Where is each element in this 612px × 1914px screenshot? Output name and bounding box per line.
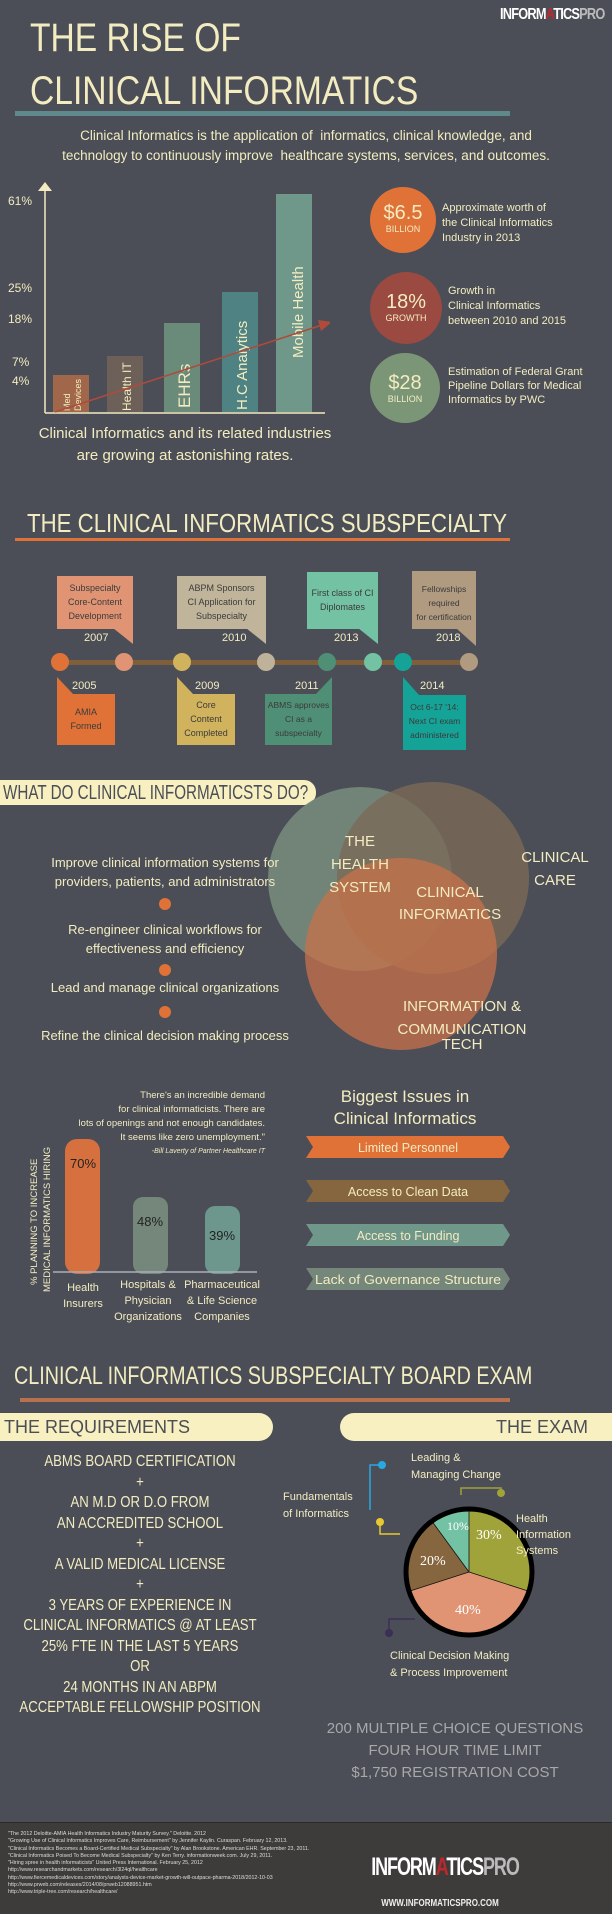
timeline: Completed [184,728,228,738]
venn diagram: CARE [534,872,576,889]
quote: lots of openings and not enough candidates. [79,1118,265,1129]
event 2007: Core-Content [68,597,122,607]
pill: the exam: THE EXAM [496,1417,588,1437]
event 2018: required [428,598,460,608]
exam pie chart: Managing Change [411,1469,501,1481]
stat: 18% growth: 18% [386,291,426,313]
bar chart: 7% [12,355,30,369]
requirements list: 3 YEARS OF EXPERIENCE IN [49,1596,231,1614]
list: what they do: Re-engineer clinical workflows for [68,922,262,937]
stat: 18% growth: Clinical Informatics [448,300,540,312]
pill: requirements [0,1413,273,1441]
issues ribbons [306,1136,510,1290]
timeline: administered [410,730,459,740]
bar chart: Devices [73,378,83,411]
exam pie chart: 20% [420,1554,446,1569]
timeline: subspecialty [275,728,322,738]
venn diagram: CLINICAL [416,884,484,901]
venn diagram: COMMUNICATION [398,1021,526,1038]
footer [0,1822,612,1914]
event 2010: Subspecialty [196,611,247,621]
stat: 28 billion: $28 [388,372,422,394]
event 2013 [307,572,378,629]
requirements list: AN ACCREDITED SCHOOL [57,1514,223,1532]
timeline: Oct 6-17 '14: [410,702,459,712]
hiring bar chart: Companies [194,1311,250,1323]
venn diagram [268,782,589,1050]
hiring bar chart: 70% [70,1156,96,1171]
bar chart [8,182,330,414]
references: http://www.prweb.com/releases/2014/08/prweb12088951.htm [8,1882,152,1888]
chart caption: are growing at astonishing rates. [77,447,293,464]
requirements list: + [136,1474,144,1490]
event 2014: 2014 [420,680,444,692]
exam pie chart: Health [516,1513,548,1525]
intro text: technology to continuously improve healthcare systems, services, and outcomes. [62,148,550,163]
exam pie chart: 30% [476,1528,502,1543]
references [8,1831,309,1895]
title: CLINICAL INFORMATICS [30,69,418,113]
bar chart: 18% [8,312,32,326]
list: what they do: effectiveness and efficiency [86,941,244,956]
timeline: 2007 [84,632,108,644]
requirements list: + [136,1576,144,1593]
stat: 28 billion [370,353,583,423]
hiring bar chart: Physician [124,1295,172,1307]
exam facts: $1,750 REGISTRATION COST [351,1764,559,1781]
footer url: WWW.INFORMATICSPRO.COM [381,1898,499,1909]
references: "Clinical Informatics Poised To Become Medical Subspecialty" by Ken Terry. informationweek.com. July 29, 2011. [8,1853,272,1859]
issues ribbons: Limited Personnel [358,1141,458,1155]
references: http://www.fiercemedicaldevices.com/story/analysts-device-market-growth-will-outpace-pharma-2018/2012-10-03 [8,1875,273,1881]
exam pie chart: & Process Improvement [390,1667,507,1679]
section title: board exam: CLINICAL INFORMATICS SUBSPECIALTY BOARD EXAM [14,1362,532,1390]
exam facts: 200 MULTIPLE CHOICE QUESTIONS [327,1720,583,1737]
hiring bar chart: Pharmaceutical [184,1279,260,1291]
stat: 28 billion: Estimation of Federal Grant [448,366,583,378]
requirements list: 24 MONTHS IN AN ABPM [63,1678,217,1696]
stat: 18% growth: GROWTH [386,313,426,323]
list: what they do: providers, patients, and administrators [55,874,275,889]
bar chart: 4% [12,374,30,388]
stat: 6.5 billion: Industry in 2013 [442,232,520,244]
biggest issues title: Clinical Informatics [334,1109,476,1128]
biggest issues title [334,1087,476,1128]
references: http://www.researchandmarkets.com/research/3l24ql/healthcare [8,1867,158,1873]
event 2007 [57,576,133,629]
exam facts [327,1720,583,1781]
exam pie chart: Information [516,1529,571,1541]
issues ribbons: Access to Funding [357,1229,459,1243]
hiring bar chart [29,1139,260,1323]
event 2007: Subspecialty [69,583,121,593]
venn diagram: INFORMATICS [399,906,501,923]
references: http://www.triple-tree.com/research/healthcare/ [8,1889,118,1895]
bar chart: Med [62,393,72,411]
hiring bar chart: MEDICAL INFORMATICS HIRING [42,1147,53,1292]
timeline [51,571,478,750]
stat: 18% growth: between 2010 and 2015 [448,315,566,327]
exam pie chart: Systems [516,1545,559,1557]
stat: 6.5 billion [370,187,553,253]
exam facts: FOUR HOUR TIME LIMIT [368,1742,542,1759]
hiring bar chart: % PLANNING TO INCREASE [29,1159,40,1285]
intro text [62,128,550,163]
stat: 18% growth [370,272,566,344]
biggest issues title: Biggest Issues in [341,1087,469,1106]
venn diagram: THE [345,833,375,850]
list: what they do: Improve clinical information systems for [51,855,279,870]
venn diagram: CLINICAL [521,849,589,866]
timeline: CI as a [285,714,312,724]
timeline: 2013 [334,632,358,644]
event 2018: Fellowships [422,584,466,594]
event 2009: 2009 [195,680,219,692]
bar chart: Health IT [120,362,134,411]
hiring bar chart: 39% [209,1228,235,1243]
list: what they do: Refine the clinical decision making process [41,1028,289,1043]
quote: There's an incredible demand [140,1090,265,1101]
stat: 6.5 billion: Approximate worth of [442,202,546,214]
issues ribbons: Access to Clean Data [348,1185,468,1199]
hiring bar chart: Insurers [63,1298,103,1310]
stat: 18% growth: Growth in [448,285,495,297]
quote: It seems like zero unemployment." [120,1132,265,1143]
references: "The 2012 Deloitte-AMIA Health Informatics Industry Maturity Survey." Deloitte. 2012 [8,1831,206,1837]
stat: 28 billion: Pipeline Dollars for Medical [448,380,581,392]
exam pie chart [283,1452,571,1679]
exam pie chart: of Informatics [283,1508,350,1520]
bar chart: EHRs [175,364,194,408]
stat: 28 billion: BILLION [388,394,422,404]
requirements list: ACCEPTABLE FELLOWSHIP POSITION [19,1699,261,1716]
hiring bar chart: & Life Science [187,1295,257,1307]
section title: subspecialty: THE CLINICAL INFORMATICS SUBSPECIALTY [27,508,507,538]
stat: 28 billion: Informatics by PWC [448,394,545,406]
timeline: Formed [70,721,102,731]
title [30,16,418,113]
pill: the exam [340,1413,612,1441]
pill: requirements: THE REQUIREMENTS [4,1417,190,1437]
event 2007: Development [68,611,122,621]
requirements list: + [136,1535,144,1552]
timeline: AMIA [75,707,97,717]
quote [79,1090,266,1155]
venn diagram: INFORMATION & [403,998,521,1015]
exam pie chart: 40% [455,1603,481,1618]
hiring bar chart: Organizations [114,1311,182,1323]
timeline: ABMS approves [268,700,329,710]
stat: 6.5 billion: the Clinical Informatics [442,217,553,229]
hiring bar chart: Health [67,1282,99,1294]
requirements list [19,1453,261,1716]
hiring bar chart: 48% [137,1214,163,1229]
intro text: Clinical Informatics is the application of informatics, clinical knowledge, and [80,128,532,143]
quote: for clinical informaticists. There are [118,1104,265,1115]
list: what they do: Lead and manage clinical organizations [51,980,279,995]
bar chart: H.C Analytics [234,321,251,410]
requirements list: AN M.D OR D.O FROM [70,1494,210,1511]
exam pie chart: Fundamentals [283,1491,353,1503]
logo top: INFORMATICSPRO [500,6,604,23]
title: THE RISE OF [30,16,241,60]
requirements list: CLINICAL INFORMATICS @ AT LEAST [23,1617,257,1634]
quote: -Bill Laverty of Partner Healthcare IT [152,1148,265,1155]
chart caption: Clinical Informatics and its related industries [39,425,331,442]
references: "Clinical Informatics Becomes a Board-Certified Medical Subspecialty" by Alan Brookstone. American EHR. September 23, 2011. [8,1846,309,1852]
event 2018: for certification [416,612,472,622]
event 2013: Diplomates [320,602,365,612]
footer logo: INFORMATICSPRO [371,1853,519,1881]
references: "Growing Use of Clinical Informatics Improves Care, Reimbursement" by Jennifer Kaylin. Curaspan. February 12, 2013. [8,1838,288,1844]
stat: 6.5 billion: BILLION [386,224,420,234]
stat: 6.5 billion: $6.5 [384,202,422,224]
timeline: Next CI exam [409,716,460,726]
event 2010 [177,576,266,629]
bar chart: 25% [8,281,32,295]
hiring bar chart: Hospitals & [120,1279,176,1291]
event 2011: 2011 [295,680,319,692]
venn diagram: HEALTH [331,856,389,873]
timeline: Content [190,714,222,724]
event 2010: ABPM Sponsors [188,583,255,593]
requirements list: OR [130,1658,150,1675]
exam pie chart: 10% [447,1519,469,1533]
timeline: 2010 [222,632,246,644]
issues ribbons: Lack of Governance Structure [315,1273,501,1287]
heading pill: what do: WHAT DO CLINICAL INFORMATICSTS DO? [3,782,308,804]
timeline: 2018 [436,632,460,644]
exam pie chart: Leading & [411,1452,461,1464]
exam pie chart: Clinical Decision Making [390,1650,509,1662]
event 2013: First class of CI [311,588,374,598]
references: "Hiring spree in health informaticists" United Press International. February 25, 2012 [8,1860,203,1866]
chart caption [39,425,331,464]
timeline: Core [196,700,216,710]
list: what they do [41,855,289,1043]
bar chart: Mobile Health [290,266,307,358]
event 2018 [412,571,476,629]
requirements list: ABMS BOARD CERTIFICATION [44,1453,236,1470]
venn diagram: SYSTEM [329,879,391,896]
bar chart: 61% [8,194,32,208]
requirements list: A VALID MEDICAL LICENSE [55,1556,225,1572]
requirements list: 25% FTE IN THE LAST 5 YEARS [42,1638,238,1654]
event 2010: CI Application for [187,597,256,607]
event 2005: 2005 [72,680,96,692]
